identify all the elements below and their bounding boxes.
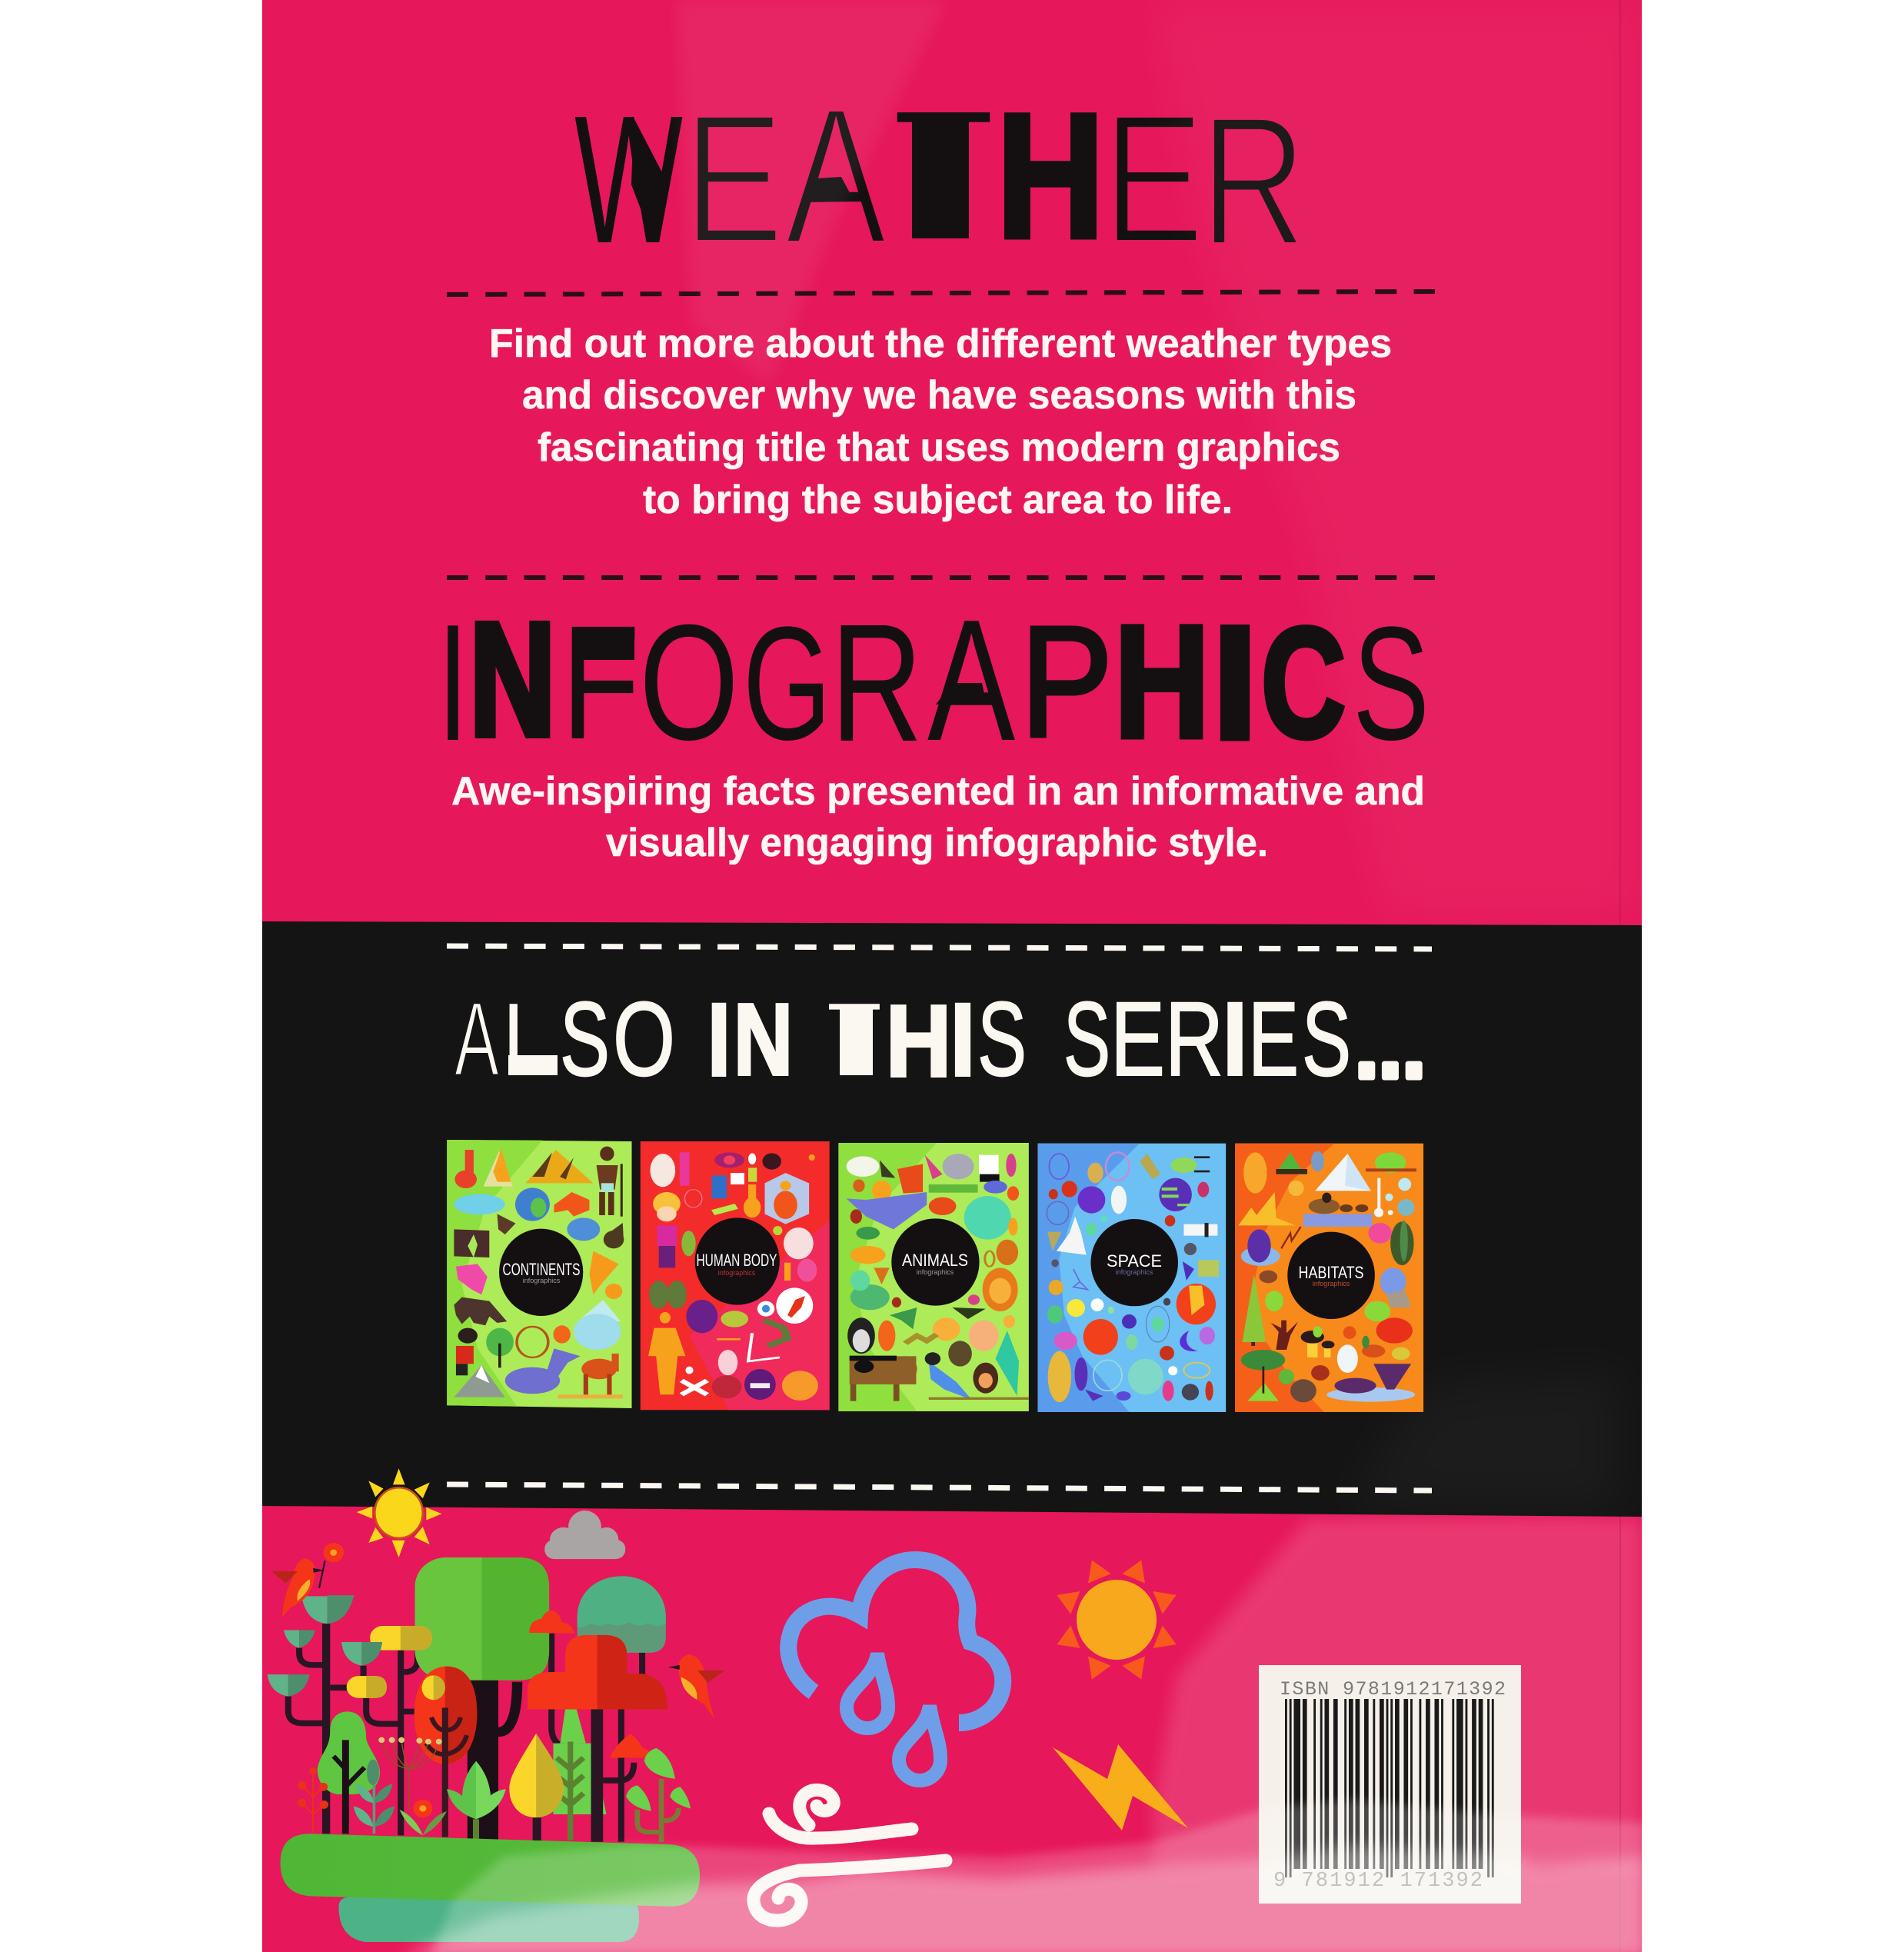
heading: ALSO IN THIS SERIES...: E [1110, 981, 1165, 1098]
book cover: Human Body [641, 1141, 830, 1410]
barcode bars [1285, 1699, 1494, 1877]
glare: bottom light reflection [400, 1800, 1646, 1952]
heading: ALSO IN THIS SERIES...: S [1064, 981, 1110, 1098]
trees and plants [268, 1557, 691, 1842]
title: INFOGRAPHICS: C [1261, 595, 1346, 771]
heading: ALSO IN THIS SERIES...: L [499, 981, 561, 1098]
heading: ALSO IN THIS SERIES...: R [1165, 981, 1223, 1098]
title: WEATHER [574, 67, 1307, 285]
heading: ALSO IN THIS SERIES...: T [826, 981, 883, 1098]
title: WEATHER: T [891, 69, 996, 279]
cover artwork: Animals [838, 1143, 1029, 1411]
title: INFOGRAPHICS: P [1020, 594, 1113, 770]
cover title: Continents: infographics [523, 1277, 561, 1284]
heading: ALSO IN THIS SERIES...: I [943, 981, 983, 1099]
cover title: Animals: infographics [917, 1268, 954, 1276]
icon: rain cloud [788, 1560, 1003, 1780]
heading: ALSO IN THIS SERIES...: O [613, 981, 675, 1098]
panel: pink book cover [262, 0, 1642, 1952]
cover title: Space: SPACE [1107, 1251, 1162, 1271]
book cover: Continents [447, 1140, 632, 1408]
title: WEATHER: R [1200, 78, 1307, 284]
book cover: Habitats [1235, 1144, 1423, 1412]
heading: ALSO IN THIS SERIES...: S [560, 981, 610, 1098]
icon: wind [754, 1790, 946, 1920]
heading: ALSO IN THIS SERIES...: S [977, 981, 1027, 1098]
title: INFOGRAPHICS: A [927, 583, 1015, 777]
heading: ALSO IN THIS SERIES...: ... [1355, 994, 1426, 1098]
cover title: Habitats: HABITATS [1298, 1263, 1364, 1282]
title: WEATHER: E [684, 75, 784, 281]
cover title: Animals [902, 1251, 968, 1276]
title: WEATHER: E [1103, 75, 1204, 281]
cover artwork: Continents [447, 1140, 632, 1408]
text block: tagline: Awe-inspiring facts presented in an informative and [451, 769, 1425, 814]
cover title: Human Body: HUMAN BODY [697, 1251, 777, 1270]
ground [281, 1834, 700, 1942]
heading: ALSO IN THIS SERIES...: N [734, 983, 793, 1096]
cover title: Habitats: infographics [1313, 1280, 1350, 1287]
heading: ALSO IN THIS SERIES...: H [886, 984, 951, 1098]
cover artwork: Human Body [641, 1141, 830, 1410]
cover title: Space: infographics [1116, 1268, 1153, 1276]
text block: description: Find out more about the different weather types [489, 321, 1392, 366]
barcode label [1259, 1665, 1521, 1904]
icon: bird right [668, 1654, 725, 1719]
title: INFOGRAPHICS: H [1114, 593, 1210, 771]
cover title: Continents [503, 1260, 580, 1284]
cover title: Continents: CONTINENTS [503, 1260, 580, 1279]
divider: white dashes lower [447, 1484, 1432, 1491]
icon: orange sun [1052, 1555, 1181, 1684]
title: INFOGRAPHICS: O [639, 591, 739, 774]
cover title: Human Body: infographics [718, 1269, 756, 1277]
text block: description [489, 321, 1392, 522]
text block: tagline [451, 769, 1425, 865]
cover artwork: Habitats [1235, 1144, 1423, 1412]
heading: ALSO IN THIS SERIES...: I [1216, 981, 1254, 1098]
text block: description: to bring the subject area to life. [643, 478, 1233, 522]
text block: description: and discover why we have seasons with this [522, 373, 1356, 418]
ISBN number text: ISBN 9781912171392 [1280, 1678, 1506, 1701]
icon: yellow sun [357, 1468, 441, 1557]
text block: description: fascinating title that uses modern graphics [538, 425, 1340, 470]
title: INFOGRAPHICS: G [743, 593, 831, 774]
icon: lightning bolt [1053, 1744, 1188, 1830]
title: WEATHER: H [997, 77, 1104, 275]
cover title: Human Body [697, 1251, 777, 1277]
text block: tagline: visually engaging infographic style. [606, 821, 1268, 865]
title: INFOGRAPHICS: F [561, 591, 640, 773]
cover title: Habitats [1298, 1263, 1364, 1287]
title: WEATHER: A [785, 67, 887, 285]
title: INFOGRAPHICS: S [1353, 593, 1430, 774]
title: INFOGRAPHICS: R [831, 590, 923, 777]
icon: bird left [271, 1543, 344, 1617]
glare: upper cover reflection [677, 0, 1642, 915]
book cover: Space [1037, 1144, 1226, 1412]
title: INFOGRAPHICS: N [470, 591, 555, 769]
illustration: forest with sun and cloud [268, 1468, 725, 1942]
divider: white dashes upper [447, 946, 1432, 949]
divider: black dashes middle [447, 575, 1435, 580]
heading: ALSO IN THIS SERIES...: I [701, 981, 737, 1099]
title: WEATHER: W [574, 78, 683, 281]
panel: black series band [262, 921, 1642, 1517]
heading: ALSO IN THIS SERIES... [454, 981, 1426, 1099]
divider: black dashes top [447, 291, 1435, 295]
heading: ALSO IN THIS SERIES...: A [454, 981, 499, 1098]
icon: grey cloud [544, 1511, 625, 1559]
cover title: Animals: ANIMALS [902, 1251, 968, 1270]
barcode digits: 9 781912 171392 [1273, 1870, 1483, 1893]
cover artwork: Space [1037, 1144, 1226, 1412]
heading: ALSO IN THIS SERIES...: E [1248, 981, 1299, 1098]
title: INFOGRAPHICS: I [438, 589, 468, 775]
title: INFOGRAPHICS [438, 583, 1430, 777]
heading: ALSO IN THIS SERIES...: S [1302, 981, 1351, 1098]
title: INFOGRAPHICS: I [1212, 592, 1258, 773]
book cover: Animals [838, 1143, 1029, 1411]
